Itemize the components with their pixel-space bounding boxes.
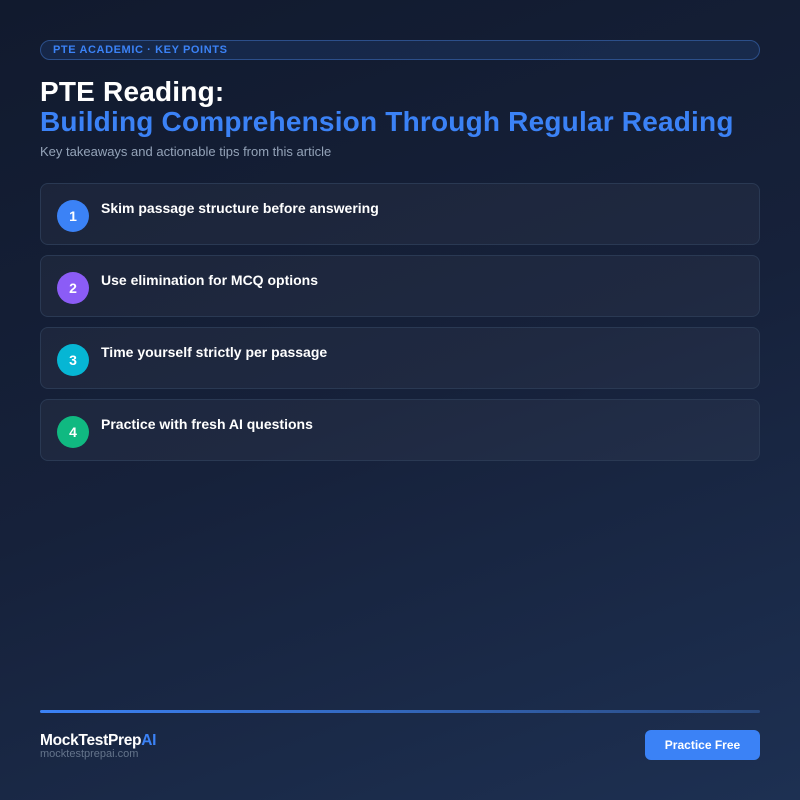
title: PTE Reading:	[40, 76, 224, 107]
card 3: Time yourself strictly per passage	[101, 344, 327, 360]
card 1	[40, 183, 760, 245]
card 2	[40, 255, 760, 317]
subtitle heading: Building Comprehension Through Regular Reading	[40, 106, 734, 137]
card 3	[40, 327, 760, 389]
brand: MockTestPrepAI	[40, 732, 156, 749]
card 1: Skim passage structure before answering	[101, 200, 379, 216]
url: mocktestprepai.com	[40, 748, 138, 760]
badge	[40, 40, 760, 60]
card 4	[40, 399, 760, 461]
card 1: 1	[69, 208, 77, 224]
card 4: 4	[69, 424, 77, 440]
badge: PTE ACADEMIC · KEY POINTS	[53, 44, 228, 56]
intro text: Key takeaways and actionable tips from this article	[40, 144, 331, 159]
card 2: Use elimination for MCQ options	[101, 272, 318, 288]
button	[645, 730, 760, 760]
button: Practice Free	[665, 738, 740, 752]
card 2: 2	[69, 280, 77, 296]
card 3: 3	[69, 352, 77, 368]
card 4: Practice with fresh AI questions	[101, 416, 313, 432]
